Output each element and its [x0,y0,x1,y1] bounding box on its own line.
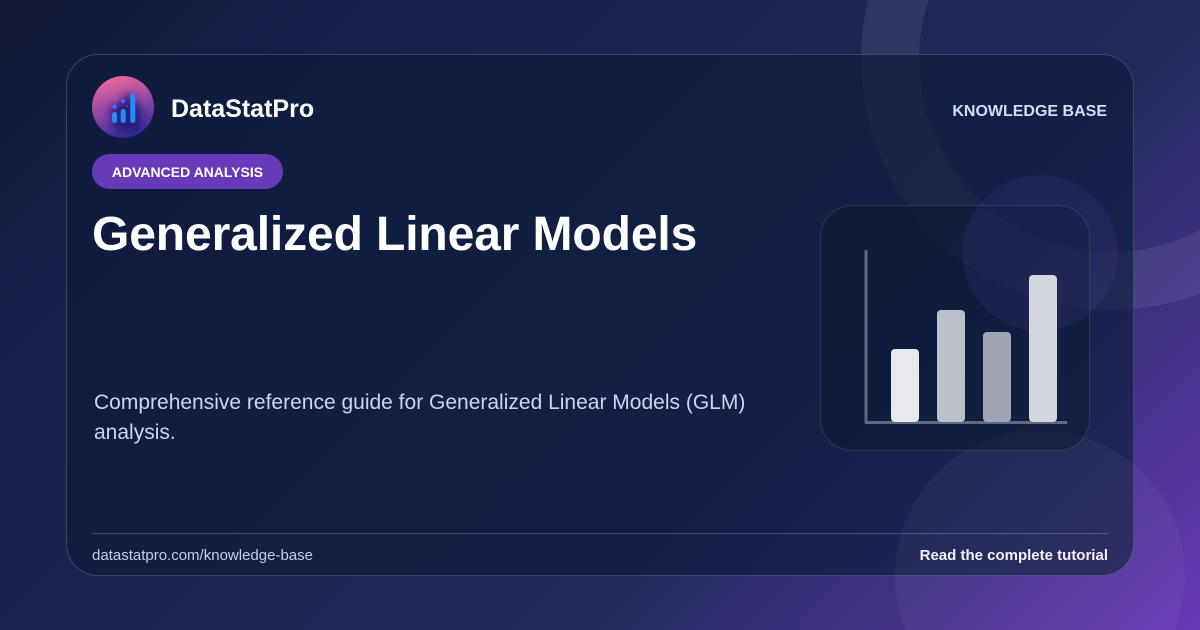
footer call to action: Read the complete tutorial [920,547,1108,564]
category badge [92,154,283,189]
decorative circle bottom right [895,430,1185,630]
category badge: ADVANCED ANALYSIS [112,164,263,180]
title: Generalized Linear Models [92,208,697,261]
brand name: DataStatPro [171,95,314,123]
decorative circle middle right [962,175,1118,331]
footer URL: datastatpro.com/knowledge-base [92,547,313,564]
icon: DataStatPro logo [92,76,154,138]
bar chart [864,250,1068,424]
footer divider [92,533,1108,534]
panel: chart illustration [820,205,1090,451]
knowledge base label: KNOWLEDGE BASE [952,103,1107,120]
panel: main card [66,54,1134,576]
description: Comprehensive reference guide for Generalized Linear Models (GLM) analysis. [94,391,745,444]
